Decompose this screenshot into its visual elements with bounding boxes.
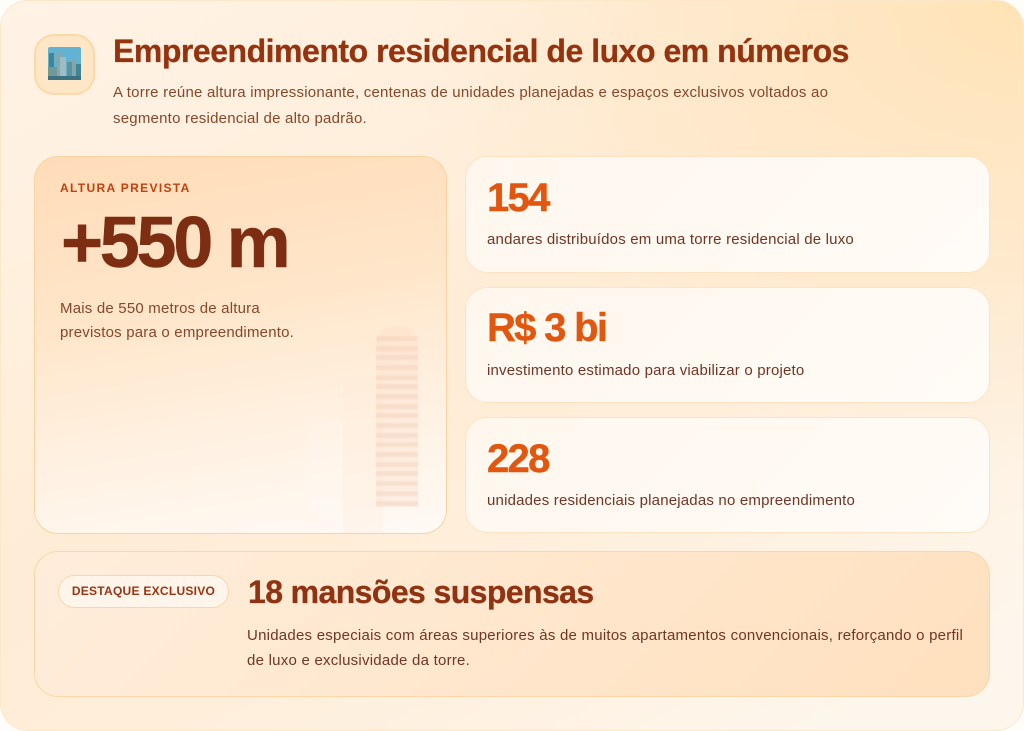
- card: R$ 3 bi: [465, 287, 990, 403]
- subtitle: [113, 84, 828, 127]
- label: investimento estimado para viabilizar o projeto: [487, 362, 804, 379]
- icon: tower silhouette: [376, 336, 418, 507]
- card: 228 unidades: [465, 417, 990, 533]
- description: Unidades especiais com áreas superiores às de muitos apartamentos convencionais, reforçando o perfil: [247, 627, 963, 644]
- number: 228: [487, 437, 549, 481]
- badge: DESTAQUE EXCLUSIVO: [72, 584, 215, 598]
- heading: 18 mansões suspensas: [248, 574, 594, 610]
- description: [60, 300, 294, 341]
- description: previstos para o empreendimento.: [60, 324, 294, 341]
- badge: [58, 575, 229, 608]
- number: 154: [487, 176, 549, 220]
- label: unidades residenciais planejadas no empreendimento: [487, 492, 855, 509]
- title: Empreendimento residencial de luxo em números: [113, 33, 849, 69]
- big number: +550 m: [61, 203, 287, 283]
- card: 154 andares: [465, 156, 990, 273]
- description: Mais de 550 metros de altura: [60, 300, 260, 317]
- description: [247, 627, 963, 669]
- header icon: city skyline: [34, 34, 95, 95]
- subtitle: segmento residencial de alto padrão.: [113, 110, 367, 127]
- subtitle: A torre reúne altura impressionante, centenas de unidades planejadas e espaços exclusivos voltados ao: [113, 84, 828, 101]
- panel: destaque exclusivo: [34, 551, 990, 697]
- panel: altura prevista: [34, 156, 447, 534]
- label: andares distribuídos em uma torre residencial de luxo: [487, 231, 854, 248]
- description: de luxo e exclusividade da torre.: [247, 652, 470, 669]
- number: R$ 3 bi: [487, 306, 606, 350]
- label: ALTURA PREVISTA: [60, 181, 191, 195]
